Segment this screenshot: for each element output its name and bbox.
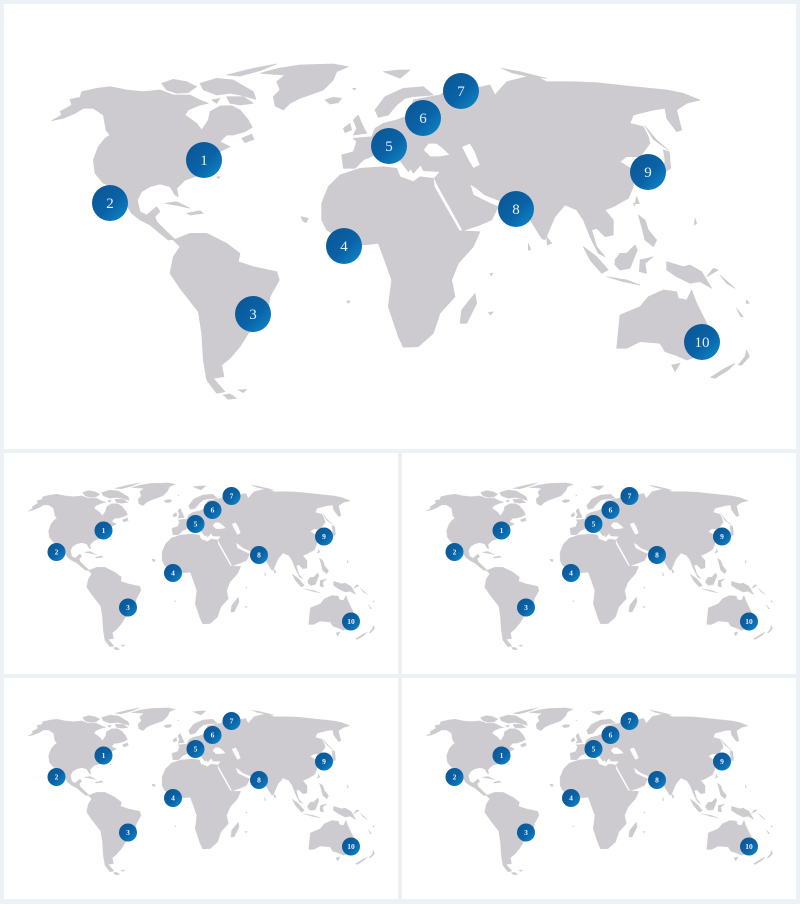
marker 8 bbox=[648, 771, 666, 789]
marker 3: 3 bbox=[249, 307, 257, 323]
marker 4: 4 bbox=[340, 239, 348, 255]
marker 5 bbox=[584, 740, 602, 758]
marker 6: 6 bbox=[609, 506, 613, 514]
marker 1 bbox=[492, 746, 510, 764]
marker 5: 5 bbox=[194, 744, 198, 754]
marker 2 bbox=[446, 543, 464, 561]
marker 1: 1 bbox=[500, 526, 504, 535]
marker 8: 8 bbox=[655, 550, 659, 560]
marker 3 bbox=[517, 598, 535, 616]
panel: small map top right bbox=[402, 453, 796, 674]
marker 10 bbox=[740, 612, 758, 630]
marker 8 bbox=[498, 191, 534, 227]
marker 10: 10 bbox=[745, 617, 753, 626]
marker 7 bbox=[443, 73, 479, 109]
marker 7: 7 bbox=[457, 84, 465, 100]
marker 6 bbox=[204, 501, 222, 519]
marker 1 bbox=[492, 522, 510, 540]
marker 9: 9 bbox=[322, 532, 326, 541]
marker 7 bbox=[222, 487, 240, 505]
marker 10 bbox=[740, 838, 758, 856]
marker 9: 9 bbox=[322, 757, 326, 766]
marker 10: 10 bbox=[694, 335, 710, 351]
marker 6: 6 bbox=[609, 730, 613, 740]
marker 8 bbox=[250, 771, 268, 789]
marker 4: 4 bbox=[171, 568, 175, 578]
panel: small map bottom right bbox=[402, 678, 796, 899]
marker 9 bbox=[315, 752, 333, 770]
marker 4 bbox=[164, 564, 182, 582]
map: large world bbox=[52, 64, 749, 399]
marker 7: 7 bbox=[628, 716, 632, 726]
marker 4 bbox=[326, 228, 362, 264]
marker 2: 2 bbox=[106, 196, 114, 212]
marker 8: 8 bbox=[655, 776, 659, 784]
marker 3 bbox=[119, 824, 137, 842]
panel: large world map bbox=[4, 4, 796, 449]
marker 6 bbox=[204, 726, 222, 744]
marker 2: 2 bbox=[453, 548, 457, 556]
panel: small map bottom left bbox=[4, 678, 398, 899]
marker 4 bbox=[562, 564, 580, 582]
marker 5: 5 bbox=[194, 520, 198, 528]
marker 9: 9 bbox=[720, 757, 724, 766]
map: top left world bbox=[28, 483, 375, 650]
marker 5 bbox=[186, 515, 204, 533]
marker 4 bbox=[164, 789, 182, 807]
marker 2: 2 bbox=[55, 548, 59, 556]
marker 7 bbox=[620, 712, 638, 730]
map: top right world bbox=[426, 483, 773, 650]
marker 3: 3 bbox=[524, 603, 528, 612]
marker 9 bbox=[713, 528, 731, 546]
marker 6 bbox=[602, 501, 620, 519]
marker 3: 3 bbox=[524, 828, 528, 837]
marker 1 bbox=[94, 522, 112, 540]
marker 2: 2 bbox=[453, 772, 457, 782]
marker 4: 4 bbox=[569, 794, 573, 802]
marker 7 bbox=[222, 712, 240, 730]
panel: small map top left bbox=[4, 453, 398, 674]
marker 10: 10 bbox=[347, 617, 355, 626]
marker 6 bbox=[602, 726, 620, 744]
marker 9: 9 bbox=[644, 165, 652, 181]
marker 10 bbox=[684, 324, 720, 360]
marker 9 bbox=[315, 528, 333, 546]
marker 3 bbox=[235, 296, 271, 332]
marker 1: 1 bbox=[102, 751, 106, 760]
marker 9 bbox=[630, 154, 666, 190]
marker 9 bbox=[713, 752, 731, 770]
marker 5: 5 bbox=[592, 520, 596, 528]
marker 3 bbox=[119, 598, 137, 616]
marker 7 bbox=[620, 487, 638, 505]
marker 6: 6 bbox=[211, 730, 215, 740]
marker 2 bbox=[48, 543, 66, 561]
map: bottom left world bbox=[28, 708, 375, 875]
marker 1: 1 bbox=[500, 751, 504, 760]
marker 2 bbox=[92, 185, 128, 221]
map: bottom right world bbox=[426, 708, 773, 875]
marker 1: 1 bbox=[200, 153, 208, 169]
marker 10 bbox=[342, 838, 360, 856]
marker 2 bbox=[446, 768, 464, 786]
marker 5 bbox=[186, 740, 204, 758]
marker 1: 1 bbox=[102, 526, 106, 535]
marker 8: 8 bbox=[512, 202, 520, 218]
marker 7: 7 bbox=[230, 716, 234, 726]
marker 10: 10 bbox=[745, 842, 753, 851]
marker 5 bbox=[584, 515, 602, 533]
marker 5: 5 bbox=[592, 744, 596, 754]
marker 10 bbox=[342, 612, 360, 630]
marker 8 bbox=[250, 546, 268, 564]
marker 6: 6 bbox=[419, 111, 427, 127]
marker 9: 9 bbox=[720, 532, 724, 541]
marker 2: 2 bbox=[55, 772, 59, 782]
marker 1 bbox=[94, 746, 112, 764]
marker 3 bbox=[517, 824, 535, 842]
marker 8 bbox=[648, 546, 666, 564]
marker 10: 10 bbox=[347, 842, 355, 851]
marker 3: 3 bbox=[126, 828, 130, 837]
marker 1 bbox=[186, 142, 222, 178]
marker 5 bbox=[371, 128, 407, 164]
marker 8: 8 bbox=[257, 776, 261, 784]
marker 8: 8 bbox=[257, 550, 261, 560]
marker 7: 7 bbox=[230, 492, 234, 500]
marker 4 bbox=[562, 789, 580, 807]
marker 7: 7 bbox=[628, 492, 632, 500]
marker 4: 4 bbox=[569, 568, 573, 578]
marker 6: 6 bbox=[211, 506, 215, 514]
marker 5: 5 bbox=[385, 139, 393, 155]
marker 4: 4 bbox=[171, 794, 175, 802]
marker 2 bbox=[48, 768, 66, 786]
marker 6 bbox=[405, 100, 441, 136]
marker 3: 3 bbox=[126, 603, 130, 612]
